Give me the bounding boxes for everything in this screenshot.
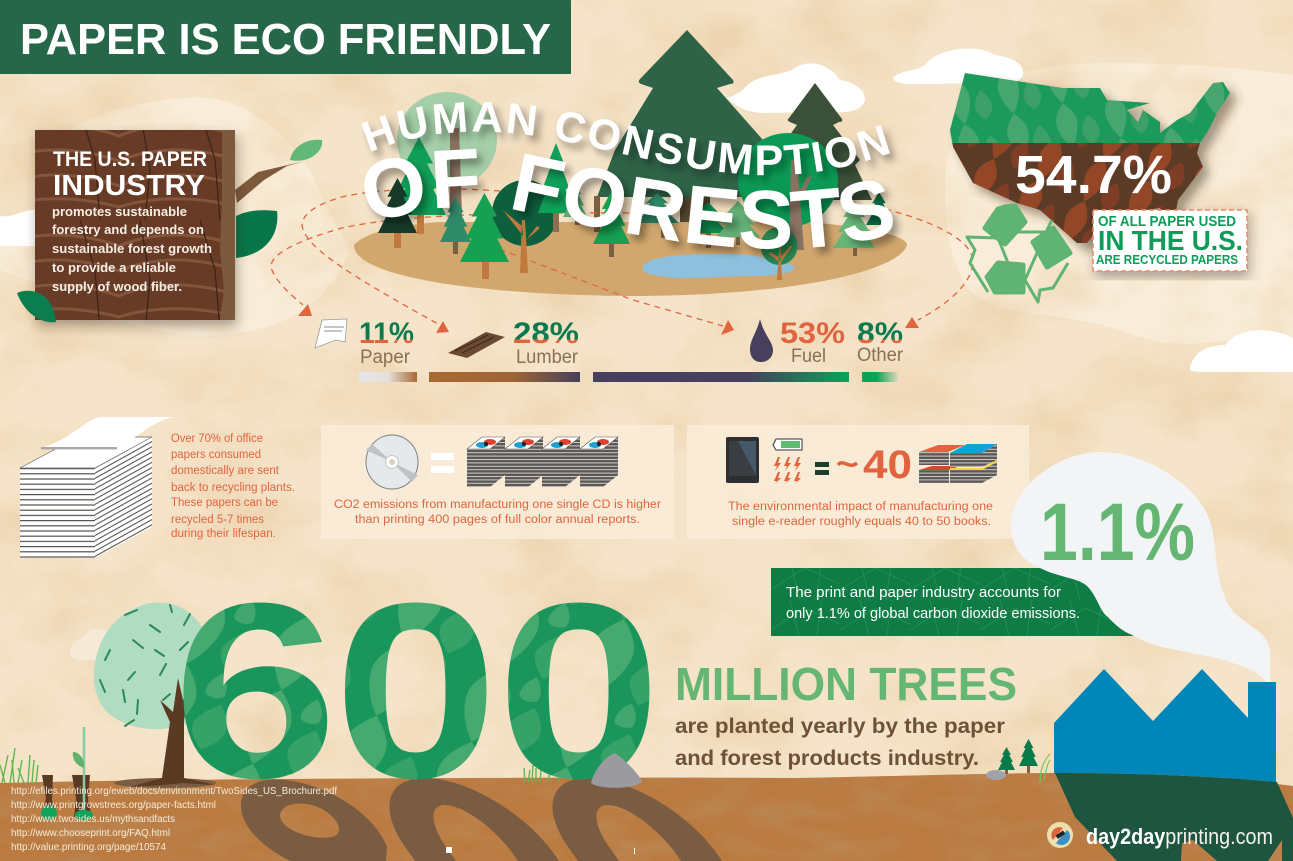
rock (591, 753, 642, 788)
million trees text: MILLION TREES (675, 658, 1017, 710)
panel: the U.S. paper industry wood block: to provide a reliable (52, 260, 176, 275)
source links: http://efiles.printing.org/eweb/docs/environment/TwoSides_US_Brochure.pdf (11, 786, 337, 797)
text: office paper recycling: These papers can be (171, 497, 278, 509)
panel: the U.S. paper industry wood block: INDUSTRY (53, 170, 205, 202)
panel: e-reader versus books: single e-reader roughly equals 40 to 50 books. (732, 516, 991, 528)
text: office paper recycling: domestically are sent (171, 465, 280, 477)
dashed connector arrows (271, 189, 973, 335)
panel: CD versus printed reports: than printing 400 pages of full color annual reports. (355, 514, 640, 526)
million trees text (675, 658, 1017, 770)
title banner (0, 0, 571, 74)
text: office paper recycling: Over 70% of office (171, 433, 263, 445)
shadows of the number 600 (241, 778, 722, 861)
icon: recycling symbol (967, 206, 1070, 302)
smoke cloud with 1.1% (1011, 452, 1270, 682)
U.S. map 54.7%: 54.7% (1015, 145, 1172, 205)
text: office paper recycling: during their lifespan. (171, 528, 276, 540)
source links: http://www.printgrowstrees.org/paper-facts.html (11, 800, 216, 811)
million trees text: and forest products industry. (675, 747, 979, 770)
heading: human consumption of forests: OF FORESTS (364, 148, 902, 260)
million trees text: are planted yearly by the paper (675, 715, 1005, 738)
chart: forest use breakdown: Other (857, 345, 904, 366)
panel: e-reader versus books (687, 425, 1029, 539)
panel: the U.S. paper industry wood block: sustainable forest growth (52, 241, 212, 256)
chart: forest use breakdown: Lumber (516, 347, 579, 368)
callout: of all paper used in the U.S. (1093, 210, 1247, 271)
chart: forest use breakdown: 11% (359, 317, 414, 350)
chart: forest use breakdown (315, 317, 904, 382)
source links: http://www.chooseprint.org/FAQ.html (11, 828, 170, 839)
chart: forest use breakdown: 28% (513, 317, 579, 350)
chart: forest use breakdown: 8% (857, 317, 903, 350)
small white marks (446, 847, 635, 854)
panel: e-reader versus books: The environmental impact of manufacturing one (728, 501, 993, 513)
callout: of all paper used in the U.S.: IN THE U.S. (1098, 225, 1243, 256)
tree planted on left (0, 602, 560, 820)
source links (11, 786, 337, 853)
factory (1054, 669, 1276, 782)
chart: forest use breakdown: Fuel (791, 346, 826, 367)
ground (0, 770, 1293, 861)
big number 600: 600 (173, 551, 662, 831)
callout: 1.1% emissions banner: only 1.1% of global carbon dioxide emissions. (786, 605, 1080, 622)
chart: forest use breakdown: 53% (780, 317, 845, 350)
callout: 1.1% emissions banner: The print and paper industry accounts for (786, 584, 1061, 601)
logo: day2dayprinting.com: day2dayprinting.com (1086, 824, 1273, 849)
clouds (0, 48, 1293, 660)
smoke cloud with 1.1%: 1.1% (1040, 487, 1195, 578)
small trees and rock by factory (986, 739, 1050, 783)
panel: CD versus printed reports (321, 425, 674, 539)
panel: the U.S. paper industry wood block: supply of wood fiber. (52, 279, 182, 294)
panel: CD versus printed reports: CO2 emissions from manufacturing one single CD is higher (334, 499, 661, 511)
factory shadow (1055, 773, 1293, 861)
callout: of all paper used in the U.S.: ARE RECYCLED PAPERS (1096, 252, 1238, 267)
panel: the U.S. paper industry wood block (17, 130, 322, 322)
chart: forest use breakdown: Paper (360, 347, 411, 368)
text: office paper recycling (171, 433, 295, 540)
icon: paper stack (20, 417, 173, 558)
callout: of all paper used in the U.S.: OF ALL PAPER USED (1098, 213, 1236, 230)
forest trees (378, 137, 892, 280)
text: office paper recycling: papers consumed (171, 449, 261, 461)
text: office paper recycling: recycled 5-7 times (171, 514, 264, 526)
panel: the U.S. paper industry wood block: THE U.S. PAPER (53, 148, 207, 171)
source links: http://www.twosides.us/mythsandfacts (11, 814, 175, 825)
callout: 1.1% emissions banner (771, 568, 1141, 636)
forest illustration (354, 30, 907, 296)
panel: e-reader versus books: 40 (863, 443, 912, 487)
U.S. map 54.7% (950, 73, 1230, 243)
title banner: PAPER IS ECO FRIENDLY (20, 15, 551, 64)
source links: http://value.printing.org/page/10574 (11, 842, 166, 853)
text: office paper recycling: back to recycling plants. (171, 482, 295, 494)
panel: the U.S. paper industry wood block: promotes sustainable (52, 204, 187, 219)
panel: the U.S. paper industry wood block: forestry and depends on (52, 222, 204, 237)
heading: human consumption of forests: HUMAN CONSUMPTION (362, 102, 898, 184)
